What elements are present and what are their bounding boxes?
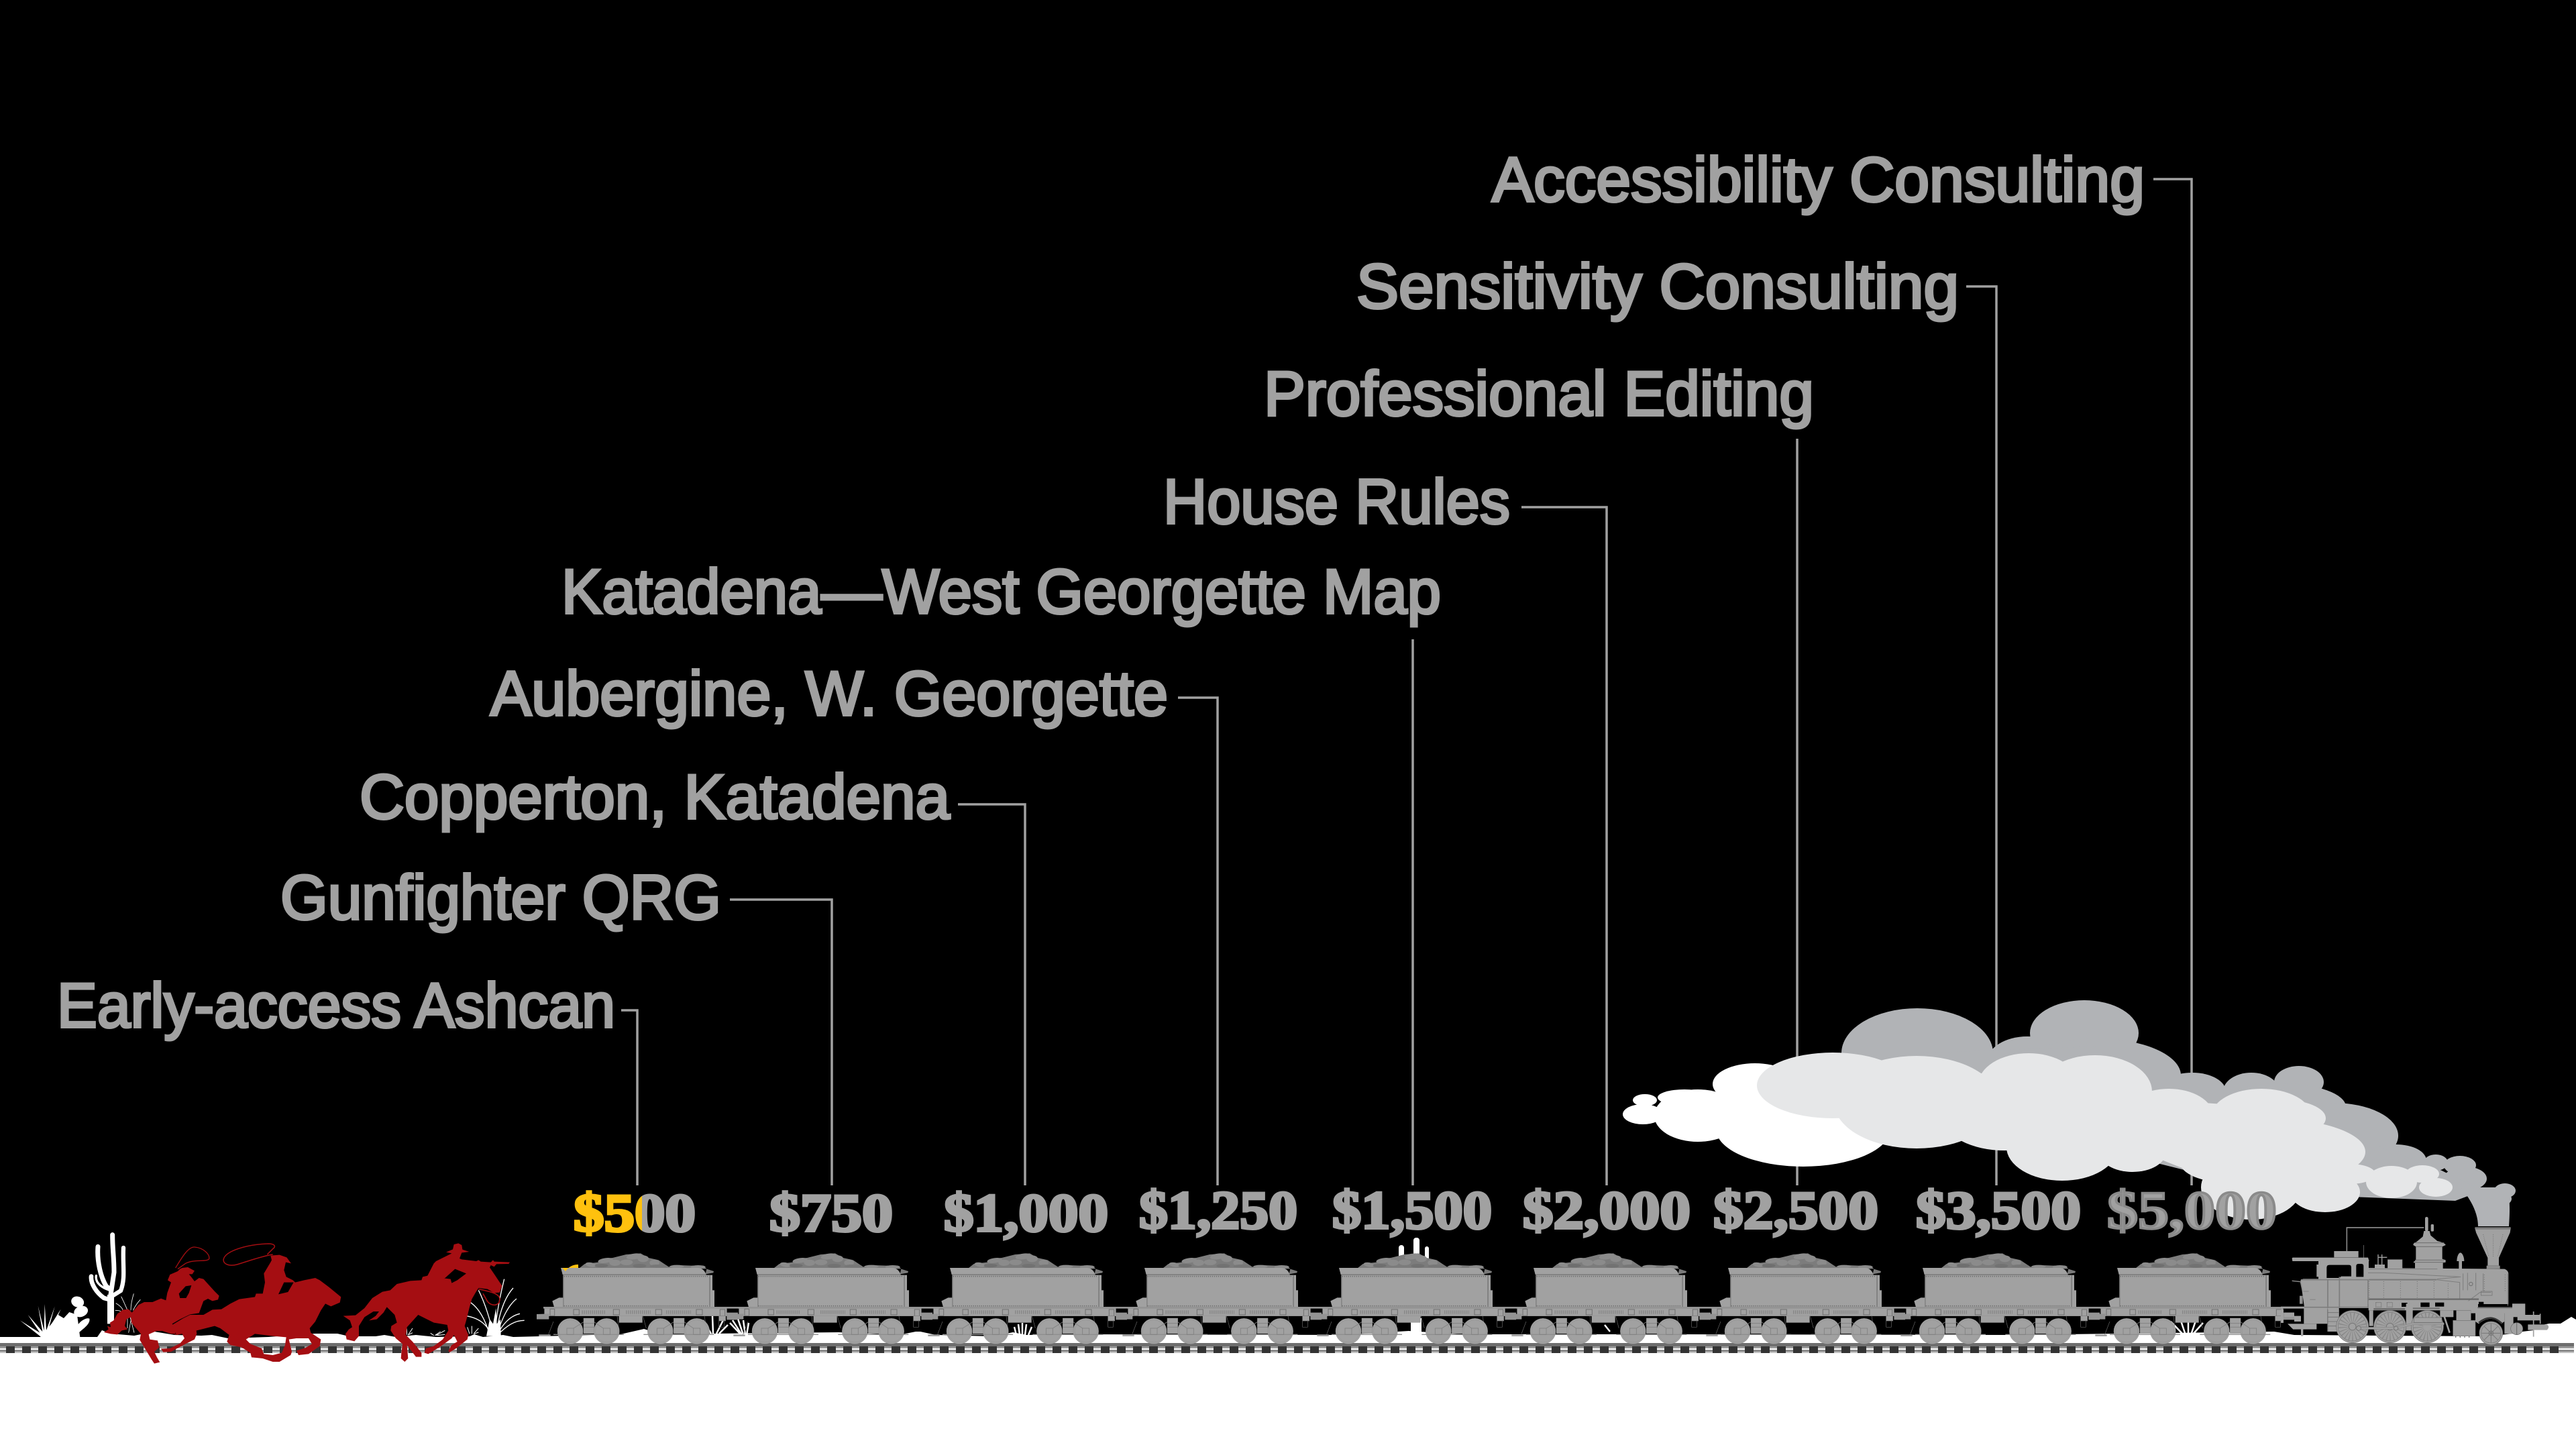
leader line: Aubergine, W. Georgette — [1178, 698, 1218, 1185]
whistle cord — [2347, 1228, 2424, 1251]
sand box — [2387, 1260, 2402, 1269]
rider 1: lasso — [176, 1247, 209, 1269]
riders — [104, 1243, 510, 1364]
label: Sensitivity Consulting: Sensitivity Consulting — [1356, 251, 1959, 321]
white ground — [0, 1317, 2576, 1449]
label: Gunfighter QRG: Gunfighter QRG — [280, 862, 721, 932]
amount: $5,000: $5,000 — [2107, 1181, 2277, 1240]
icon: prickly pear — [40, 1295, 90, 1337]
firebox — [2292, 1277, 2369, 1324]
car 9 — [2093, 1252, 2306, 1344]
locomotive — [2281, 1217, 2548, 1345]
leader line: Gunfighter QRG — [730, 900, 832, 1185]
label: Copperton, Katadena: Copperton, Katadena — [360, 761, 951, 832]
stretch goal labels — [57, 144, 2145, 1040]
label: Accessibility Consulting: Accessibility Consulting — [1492, 144, 2145, 215]
cylinder — [2453, 1310, 2475, 1337]
car 1 — [537, 1252, 749, 1344]
car 5 — [1315, 1252, 1527, 1344]
leader line: Early-access Ashcan — [621, 1010, 637, 1185]
white steam layer — [1623, 1063, 1890, 1167]
desert plants — [20, 1235, 2203, 1337]
driver wheel 2 — [2374, 1311, 2406, 1343]
smokestack — [2475, 1227, 2511, 1269]
leader line: House Rules — [1521, 507, 1607, 1185]
pledge amounts — [574, 1181, 2277, 1243]
label: Early-access Ashcan: Early-access Ashcan — [57, 970, 615, 1040]
icon: grass between cars — [703, 1316, 2203, 1336]
leader lines — [621, 179, 2192, 1185]
rider 3: arm gap — [444, 1269, 466, 1283]
amount: $2,500: $2,500 — [1713, 1181, 1878, 1240]
driver wheel 3 — [2411, 1311, 2443, 1343]
rider 2: arm gap — [278, 1283, 294, 1294]
amount: $2,000: $2,000 — [1523, 1181, 1690, 1240]
amount: $1,000: $1,000 — [944, 1184, 1108, 1243]
leader line: Accessibility Consulting — [2153, 179, 2192, 1185]
leader line: Katadena—West Georgette Map — [1411, 639, 1414, 1185]
icon: cactus behind fifth car — [1399, 1238, 1429, 1337]
pilot wheel — [2479, 1322, 2503, 1345]
rider 3: horse silhouette — [343, 1243, 510, 1362]
rider 2: horse silhouette — [172, 1255, 341, 1362]
amount: $3,500: $3,500 — [1916, 1181, 2081, 1240]
rider 1: arm gap — [179, 1285, 191, 1298]
amount: $750: $750 — [769, 1184, 893, 1243]
amount: $1,250: $1,250 — [1139, 1181, 1297, 1240]
steam dome — [2413, 1217, 2446, 1269]
leader line: Professional Editing — [1796, 439, 1799, 1185]
rail track — [0, 1343, 2574, 1353]
icon: small tufts — [407, 1326, 478, 1336]
icon: saguaro cactus — [91, 1235, 123, 1324]
label: Professional Editing: Professional Editing — [1264, 358, 1814, 429]
boiler — [2367, 1268, 2508, 1306]
steam cloud — [1623, 1000, 2516, 1226]
running gear frame — [2327, 1301, 2483, 1332]
car 6 — [1509, 1252, 1722, 1344]
rider 3: rein loop — [478, 1289, 500, 1305]
gold coal highlight on first car — [562, 1265, 578, 1271]
label: Katadena—West Georgette Map: Katadena—West Georgette Map — [561, 556, 1441, 627]
label: Aubergine, W. Georgette: Aubergine, W. Georgette — [490, 658, 1168, 729]
car 2 — [731, 1252, 944, 1344]
light steam layer — [1757, 1053, 2453, 1220]
bell — [2457, 1252, 2464, 1269]
dark smoke layer — [1841, 1000, 2516, 1226]
car 4 — [1120, 1252, 1333, 1344]
amount: $1,500: $1,500 — [1332, 1181, 1492, 1240]
rider 2: lasso — [223, 1244, 274, 1265]
label: House Rules: House Rules — [1163, 466, 1510, 537]
icon: agave — [20, 1304, 61, 1337]
front frame and pilot — [2471, 1303, 2548, 1337]
tender coupling — [2281, 1307, 2316, 1336]
car 7 — [1704, 1252, 1917, 1344]
driver wheel 1 — [2337, 1311, 2369, 1343]
connecting rods — [2357, 1313, 2450, 1333]
rider 1: horse silhouette — [104, 1267, 219, 1364]
car 8 — [1898, 1252, 2111, 1344]
cab — [2292, 1251, 2369, 1281]
train — [537, 1217, 2548, 1345]
leader line: Copperton, Katadena — [958, 804, 1025, 1185]
leader line: Sensitivity Consulting — [1966, 286, 1996, 1185]
icon: grass behind first horse — [115, 1293, 140, 1333]
amount: $500: $500 — [574, 1184, 696, 1243]
car 3 — [926, 1252, 1138, 1344]
icon: grass beside third horse — [466, 1279, 525, 1336]
